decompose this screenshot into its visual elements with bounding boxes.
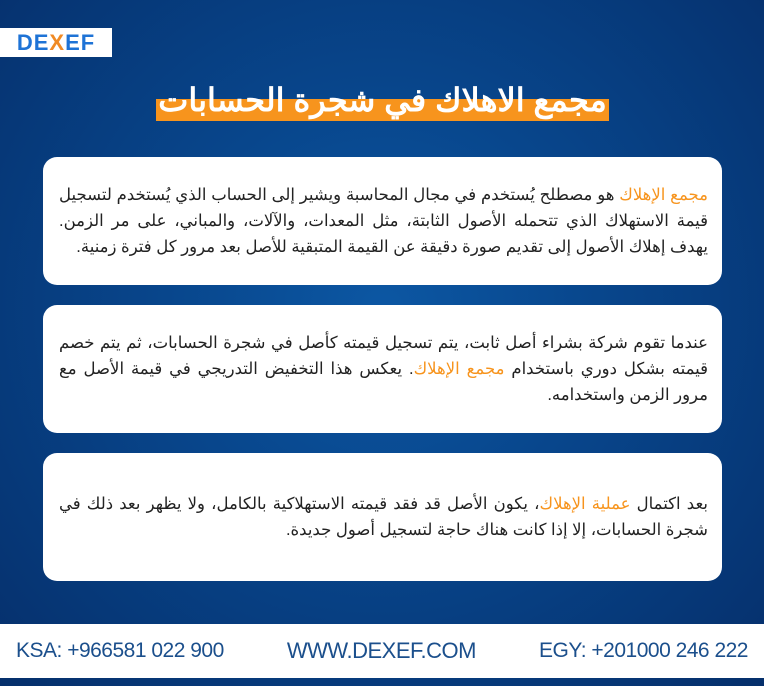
footer contacts: EGY: +201000 246 222 [539, 639, 748, 662]
title: مجمع الاهلاك في شجرة الحسابات [158, 82, 607, 118]
card: process: عندما تقوم شركة بشراء أصل ثابت، يتم تسجيل قيمته كأصل في شجرة الحسابات، ثم يتم خصم قيمته بشكل دوري باستخدام مجمع الإهلاك. يعكس هذا التخفيض التدريجي في قيمة الأصل مع مرور الزمن واستخدامه. [59, 334, 708, 404]
card: definition [43, 157, 722, 285]
logo: X [49, 30, 65, 54]
card: process [43, 305, 722, 433]
footer contacts: KSA: +966581 022 900 [16, 639, 224, 662]
card: definition: مجمع الإهلاك هو مصطلح يُستخدم في مجال المحاسبة ويشير إلى الحساب الذي يُستخدم لتسجيل قيمة الاستهلاك الذي تتحمله الأصول الثابتة، مثل المعدات، والآلات، والمباني، على مر الزمن. يهدف إهلاك الأصول إلى تقديم صورة دقيقة عن القيمة المتبقية للأصل بعد مرور كل فترة زمنية. [59, 186, 708, 256]
logo: DE EF [17, 30, 95, 54]
card: completion [43, 453, 722, 581]
footer contacts [0, 624, 764, 678]
footer contacts: WWW.DEXEF.COM [287, 638, 476, 663]
card: completion: بعد اكتمال عملية الإهلاك، يكون الأصل قد فقد قيمته الاستهلاكية بالكامل، ولا يظهر بعد ذلك في شجرة الحسابات، إلا إذا كانت هناك حاجة لتسجيل أصول جديدة. [59, 495, 708, 539]
logo [0, 28, 112, 57]
